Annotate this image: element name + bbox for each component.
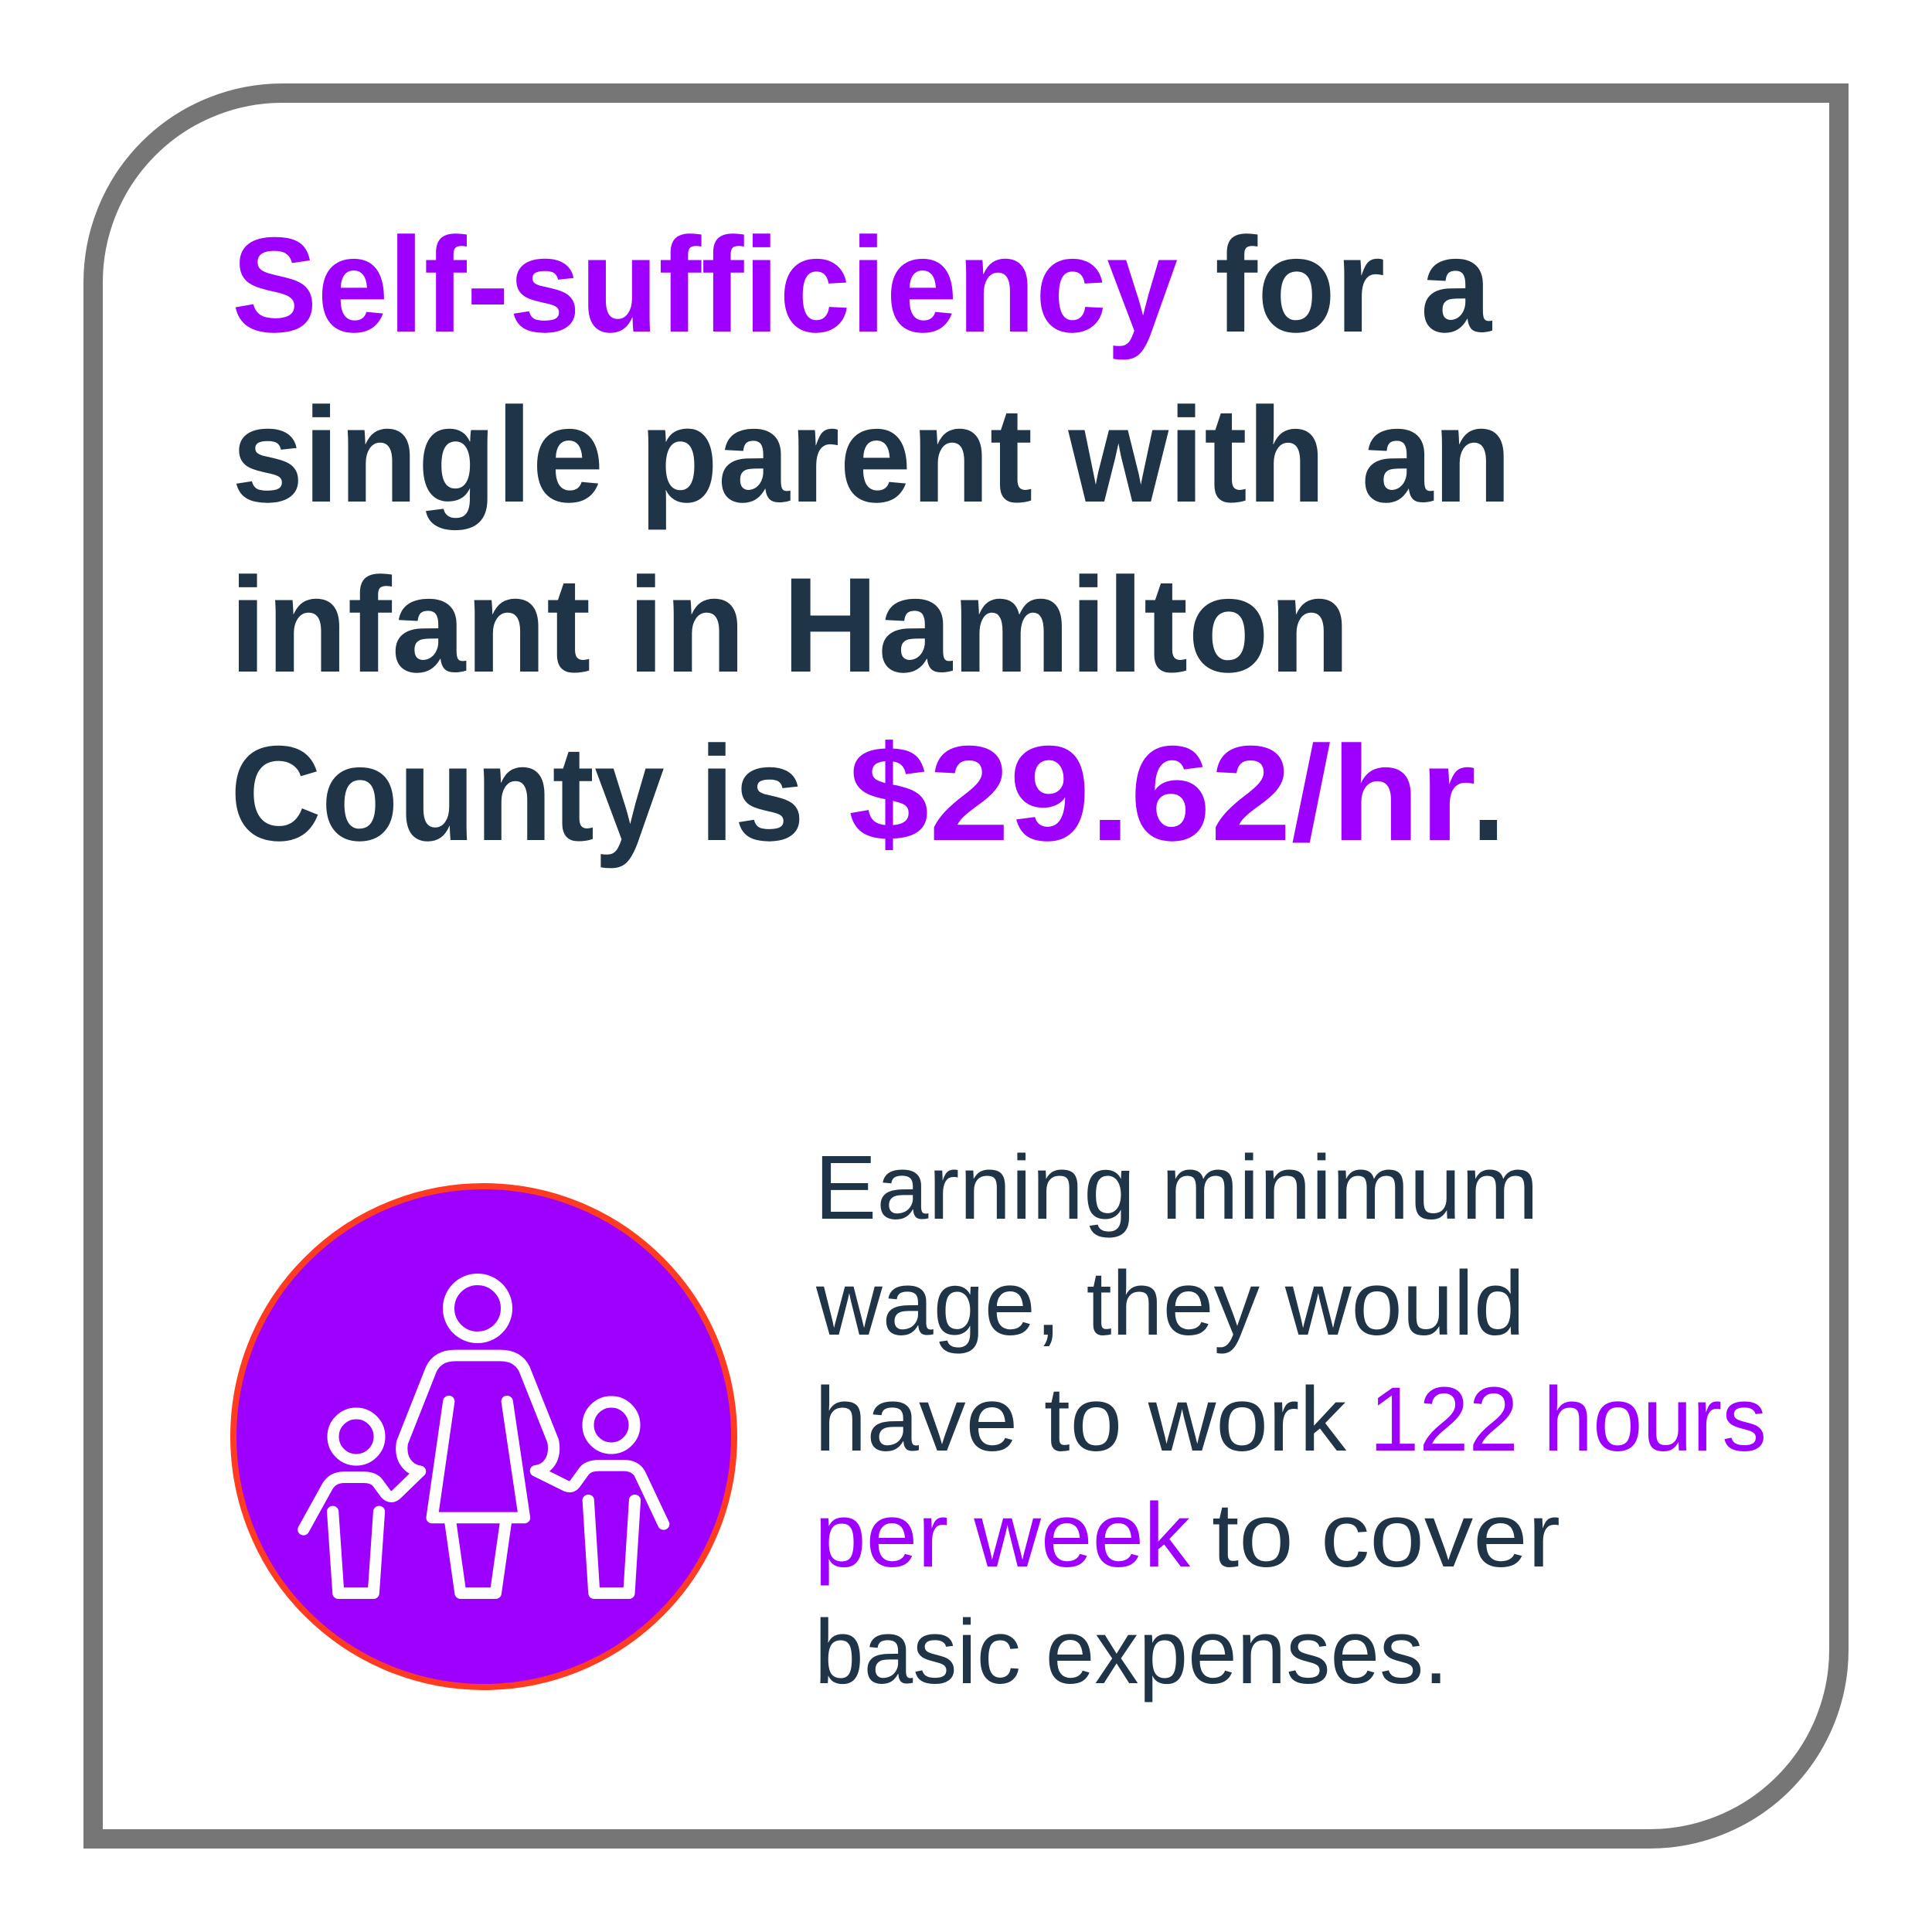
text block: minimum wage hours: to cover — [1212, 1485, 1560, 1587]
heading: self-sufficiency wage: Self-sufficiency — [232, 210, 1178, 361]
text block: minimum wage hours: have to work — [815, 1369, 1347, 1471]
heading: self-sufficiency wage — [230, 210, 1512, 869]
icon background circle — [233, 1186, 734, 1687]
text block: minimum wage hours: basic expenses. — [815, 1601, 1448, 1703]
text block: minimum wage hours: 122 hours — [1369, 1369, 1767, 1471]
heading: self-sufficiency wage: . — [1471, 719, 1505, 869]
heading: self-sufficiency wage: $29.62/hr — [849, 719, 1476, 869]
heading: self-sufficiency wage: for a — [1215, 210, 1493, 361]
icon: parent with two children in purple circle — [233, 1186, 734, 1687]
text block: minimum wage hours: Earning minimum — [815, 1137, 1539, 1239]
icon: family line figures — [304, 1280, 664, 1594]
text block: minimum wage hours: per week — [815, 1485, 1191, 1587]
text block: minimum wage hours — [815, 1137, 1767, 1703]
heading: self-sufficiency wage: County is — [230, 719, 804, 869]
heading: self-sufficiency wage: infant in Hamilton — [230, 550, 1350, 701]
heading: self-sufficiency wage: single parent with an — [232, 380, 1512, 531]
text block: minimum wage hours: wage, they would — [815, 1253, 1525, 1355]
